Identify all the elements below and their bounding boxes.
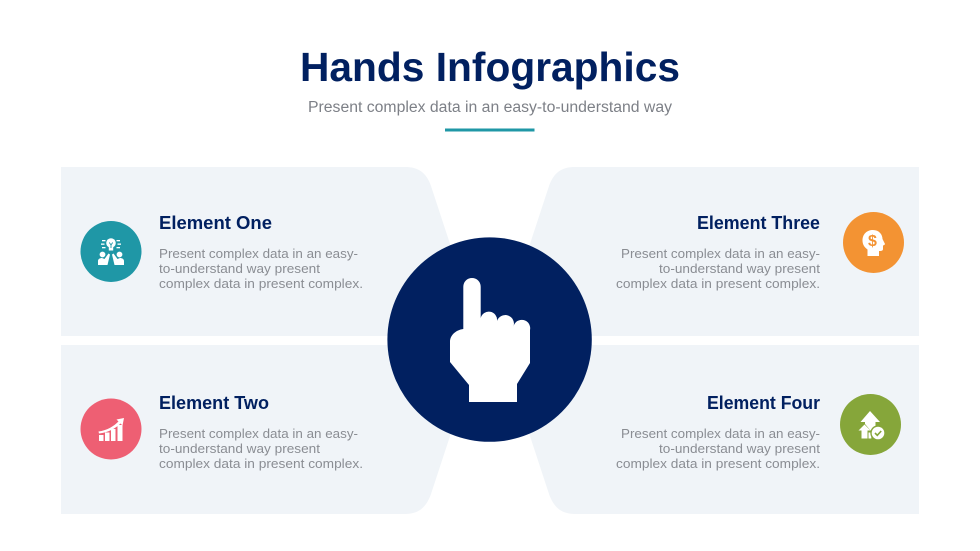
text: element two: complex data in present complex.	[159, 456, 363, 471]
text: element three: Present complex data in an easy-	[621, 246, 820, 261]
text: element four: Present complex data in an easy-	[621, 426, 820, 441]
text: element one: Present complex data in an easy-	[159, 246, 358, 261]
text: element four: to-understand way present	[659, 441, 820, 456]
subtitle: Present complex data in an easy-to-understand way	[308, 99, 672, 116]
panel: element two	[61, 345, 452, 514]
icon: head with dollar sign: $	[868, 233, 877, 250]
text: element one: to-understand way present	[159, 261, 320, 276]
text: element two: to-understand way present	[159, 441, 320, 456]
heading: element three: Element Three	[697, 212, 820, 233]
text: element four: complex data in present complex.	[616, 456, 820, 471]
heading: element four: Element Four	[707, 392, 820, 413]
text: element one: complex data in present complex.	[159, 276, 363, 291]
title underline	[445, 128, 534, 132]
text: element three: to-understand way present	[659, 261, 820, 276]
icon: lightbulb and people	[80, 221, 142, 282]
panel: element four	[528, 345, 919, 514]
icon: up arrows with check badge	[840, 394, 901, 455]
heading: element one: Element One	[159, 212, 272, 233]
panel: element three	[528, 167, 919, 336]
text: element three: complex data in present complex.	[616, 276, 820, 291]
icon: rising bar chart	[80, 398, 142, 460]
title: Hands Infographics	[300, 44, 680, 90]
panel: element one	[61, 167, 452, 336]
icon: pointing hand	[450, 278, 530, 402]
icon: head with dollar sign	[843, 212, 904, 273]
text: element two: Present complex data in an easy-	[159, 426, 358, 441]
heading: element two: Element Two	[159, 392, 269, 413]
central circle with pointing hand	[387, 237, 592, 442]
